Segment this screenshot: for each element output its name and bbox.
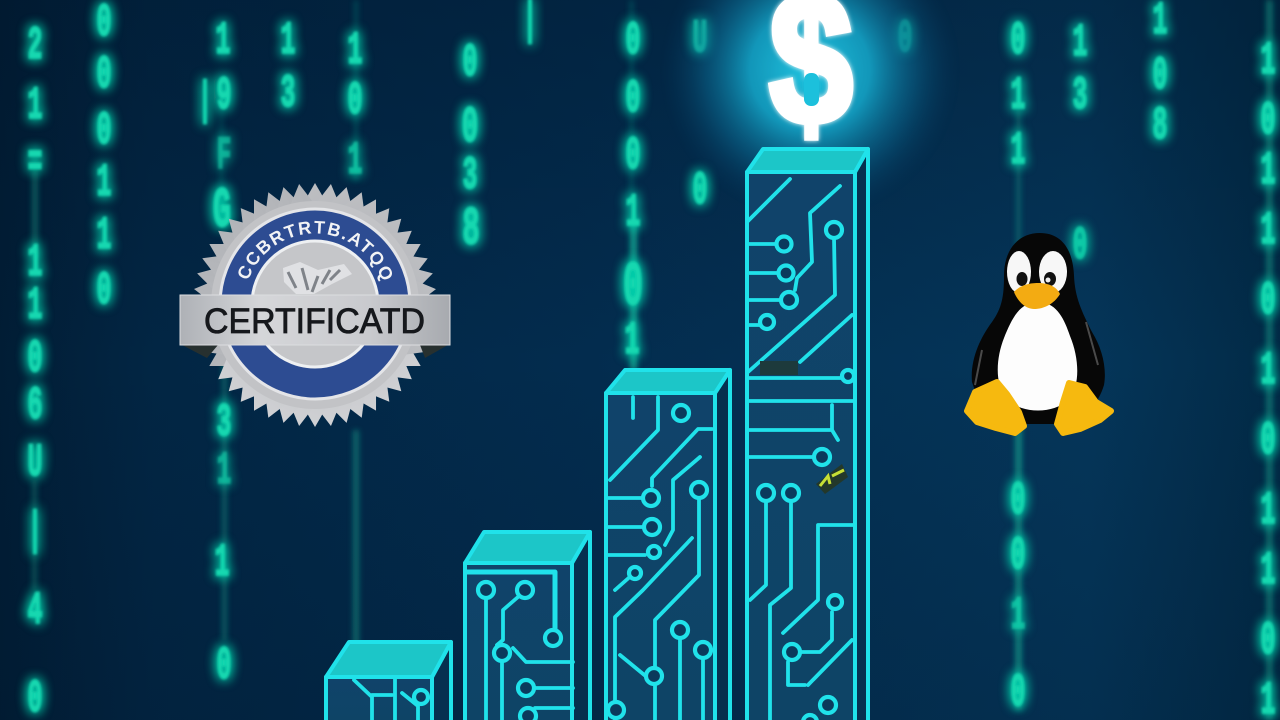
seal teeth (193, 144, 476, 449)
matrix code column 2: 0 (97, 105, 111, 158)
matrix code column 10 (1261, 35, 1275, 720)
matrix code column 10: 0 (1261, 275, 1275, 328)
penguin belly (998, 302, 1077, 410)
matrix code column 3: | (198, 75, 212, 128)
matrix code column 1: U (28, 437, 42, 490)
matrix code column 7: 1 (626, 187, 640, 240)
matrix code column 5: 0 (348, 75, 362, 128)
matrix code column 6: 8 (462, 199, 480, 260)
inner disc (252, 241, 378, 367)
left foot (967, 382, 1024, 433)
matrix code column 10: 0 (1261, 615, 1275, 668)
matrix code column 10: 1 (1261, 345, 1275, 398)
matrix code column 8: 0 (1011, 15, 1025, 68)
matrix code column 7: 0 (626, 15, 640, 68)
matrix code column 6: 0 (463, 37, 477, 90)
matrix code column 3: 3 (217, 397, 231, 450)
matrix code column 7: U (693, 13, 707, 66)
matrix code column 10: 0 (1261, 415, 1275, 468)
chip: dark (760, 361, 798, 375)
arc text: CCBRTRTB.ATQQ (238, 220, 392, 282)
matrix code column 7: 0 (626, 130, 640, 183)
matrix code column 5: 1 (348, 135, 362, 188)
ribbon tails (182, 345, 448, 358)
matrix code column 7: 0 (626, 73, 640, 126)
dollar glow (660, 0, 960, 220)
certificate badge (180, 183, 450, 427)
bar 1 (326, 642, 451, 720)
matrix code column 3 (198, 15, 231, 693)
matrix code column 10: 0 (1261, 95, 1275, 148)
matrix code column 8: 1 (1011, 70, 1025, 123)
matrix code column 3: 1 (216, 15, 230, 68)
matrix code column 1: 1 (28, 80, 42, 133)
matrix code column 10: 1 (1261, 35, 1275, 88)
matrix code column 8: 0 (1011, 667, 1025, 720)
matrix code column 4 (281, 15, 295, 121)
matrix code column 4: 3 (281, 68, 295, 121)
flipper highlights (975, 322, 1098, 385)
penguin beak (1014, 283, 1060, 309)
chip: yellow (816, 464, 848, 494)
matrix code column 10: 1 (1261, 545, 1275, 598)
matrix code column 9: 1 (1073, 17, 1087, 70)
matrix code column 8: 0 (898, 13, 912, 66)
right foot (1057, 383, 1111, 433)
matrix code column 1: = (28, 137, 42, 190)
matrix code column 7: 1 (625, 315, 639, 368)
matrix code column 7 (623, 13, 707, 368)
matrix code column 8: 1 (1011, 125, 1025, 178)
matrix code column 9: 3 (1073, 70, 1087, 123)
matrix code column 8 (898, 13, 1025, 720)
blue ring (220, 209, 410, 399)
matrix code column 10: 1 (1261, 205, 1275, 258)
ribbon (180, 295, 450, 345)
matrix code column 3: G (213, 178, 231, 243)
matrix code column 1: | (28, 505, 42, 558)
matrix code column 3: 1 (215, 537, 229, 590)
matrix code column 4: 1 (281, 15, 295, 68)
matrix code column 1: 2 (28, 20, 42, 73)
matrix code column 1: 0 (28, 333, 42, 386)
matrix code column 10: 1 (1261, 485, 1275, 538)
ribbon text: CERTIFICATD (204, 302, 425, 341)
matrix code column 5: 1 (348, 25, 362, 78)
icon: Linux penguin (967, 233, 1111, 433)
matrix code column 9: 0 (1073, 220, 1087, 273)
matrix code column 1 (28, 20, 42, 720)
bar 4 (747, 149, 868, 720)
emblem (283, 262, 352, 294)
matrix code column 5 (348, 25, 362, 188)
matrix code column 8: 0 (1011, 530, 1025, 583)
matrix code column 2: 0 (97, 265, 111, 318)
matrix code column 9 (1073, 0, 1167, 273)
matrix code column 3: F (217, 130, 231, 183)
matrix code column 1: 6 (28, 380, 42, 433)
matrix code column 7: 0 (623, 253, 643, 323)
bar 2 (465, 532, 590, 720)
matrix code column 3: 1 (217, 445, 231, 498)
matrix code column 6 (462, 0, 537, 260)
matrix code column 1: 4 (28, 585, 42, 638)
matrix code column 2: 1 (97, 210, 111, 263)
penguin body (972, 233, 1105, 424)
matrix code column 2 (97, 0, 111, 318)
matrix code column 2: 0 (97, 49, 111, 102)
matrix code column 3: 9 (217, 70, 231, 123)
matrix code column 9: 8 (1153, 100, 1167, 153)
matrix code column 8: 1 (1011, 590, 1025, 643)
penguin eyes (1007, 251, 1067, 293)
matrix code column 1: 1 (28, 237, 42, 290)
matrix code column 7: 0 (693, 165, 707, 218)
matrix code column 8: 0 (1011, 475, 1025, 528)
matrix code column 2: 1 (97, 157, 111, 210)
matrix code column 6: 3 (463, 150, 477, 203)
matrix code column 6: 0 (462, 100, 478, 157)
matrix code column 1: 1 (28, 280, 42, 333)
bar 3 (606, 370, 730, 720)
matrix code column 10: 1 (1261, 145, 1275, 198)
matrix code column 9: 0 (1153, 50, 1167, 103)
matrix code column 3: 0 (217, 640, 231, 693)
